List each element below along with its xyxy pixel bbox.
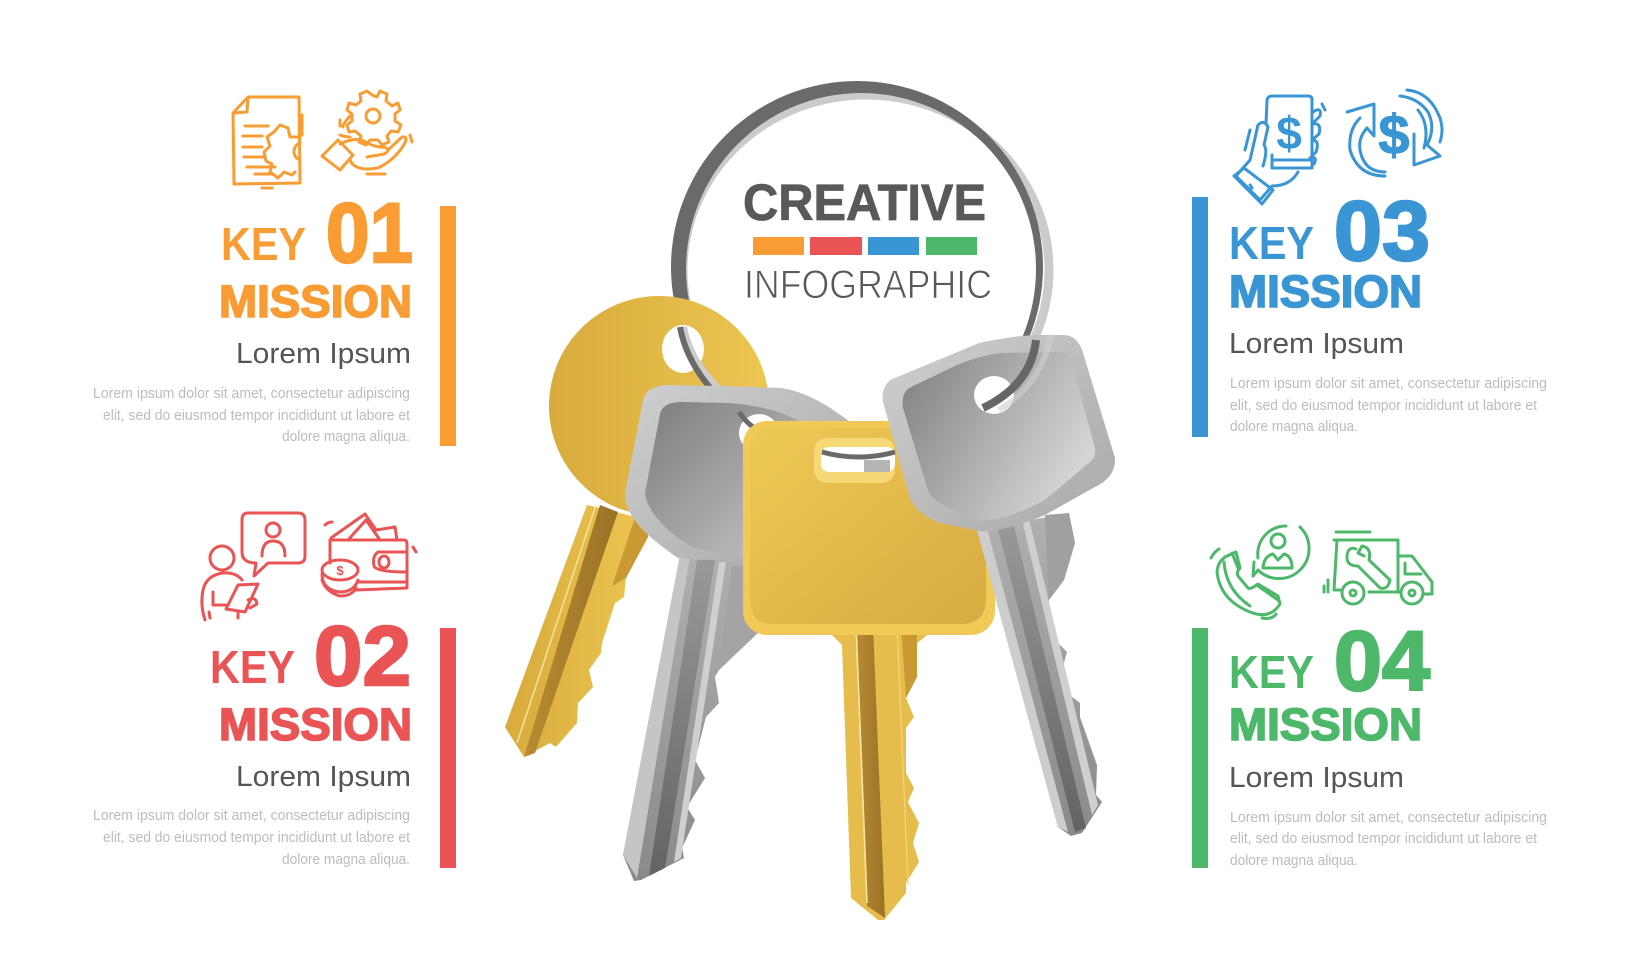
accent bar 04 [1192, 628, 1208, 868]
heading key 04 [1229, 614, 1430, 708]
title word creative: CREATIVE [743, 174, 986, 231]
heading key 01 [221, 186, 413, 280]
mission heading 03: MISSION [1229, 266, 1422, 317]
heading key 01: KEY [221, 218, 306, 270]
subheading 01: Lorem Ipsum [236, 338, 411, 370]
key ring and keys illustration [505, 81, 1115, 920]
heading key 02 [210, 609, 411, 703]
metal key ring [671, 81, 1049, 453]
mission heading 01: MISSION [219, 276, 412, 327]
title word infographic: INFOGRAPHIC [744, 263, 992, 307]
icons 02: consultant and wallet: $ [336, 563, 344, 578]
gold round key [505, 296, 769, 757]
accent bar 01 [440, 206, 456, 446]
heading key 02: 02 [314, 609, 411, 703]
body text 01: elit, sed do eiusmod tempor incididunt ut labore et [103, 408, 410, 424]
body text 02 [93, 808, 410, 868]
subheading 03: Lorem Ipsum [1229, 328, 1404, 360]
heading key 02: KEY [210, 641, 295, 693]
panel: key 03 mission [1192, 90, 1547, 437]
body text 04 [1230, 810, 1547, 869]
subheading 04: Lorem Ipsum [1229, 762, 1404, 794]
heading key 03: KEY [1229, 217, 1314, 269]
icons 03: phone payment and money cycle: $ [1378, 103, 1410, 166]
silver left key [623, 385, 849, 881]
icons 02: consultant and wallet [202, 513, 416, 620]
mission heading 02: MISSION [219, 699, 412, 750]
title: creative infographic [743, 174, 992, 307]
mission heading 04: MISSION [1229, 699, 1422, 750]
body text 04: dolore magna aliqua. [1230, 853, 1358, 869]
body text 03: elit, sed do eiusmod tempor incididunt ut labore et [1230, 398, 1537, 414]
body text 04: Lorem ipsum dolor sit amet, consectetur adipiscing [1230, 810, 1547, 826]
heading key 03 [1229, 184, 1430, 278]
icons 03: phone payment and money cycle [1234, 90, 1442, 204]
heading key 04: KEY [1229, 646, 1314, 698]
heading key 03: 03 [1334, 184, 1430, 278]
heading key 04: 04 [1334, 614, 1430, 708]
body text 02: Lorem ipsum dolor sit amet, consectetur adipiscing [93, 808, 410, 824]
icons 04: support call and service truck [1211, 526, 1432, 618]
body text 02: elit, sed do eiusmod tempor incididunt ut labore et [103, 830, 410, 846]
body text 01: dolore magna aliqua. [282, 429, 410, 445]
heading key 01: 01 [326, 186, 413, 280]
body text 03: dolore magna aliqua. [1230, 419, 1358, 435]
body text 02: dolore magna aliqua. [282, 852, 410, 868]
silver right key [883, 335, 1115, 836]
body text 01: Lorem ipsum dolor sit amet, consectetur adipiscing [93, 386, 410, 402]
panel: key 01 mission [93, 91, 456, 446]
icons 01: document gear and hand gear [233, 91, 412, 188]
accent bar 03 [1192, 197, 1208, 437]
panel: key 02 mission [93, 513, 456, 868]
subheading 02: Lorem Ipsum [236, 761, 411, 793]
body text 03 [1230, 376, 1547, 435]
body text 03: Lorem ipsum dolor sit amet, consectetur adipiscing [1230, 376, 1547, 392]
body text 01 [93, 386, 410, 445]
body text 04: elit, sed do eiusmod tempor incididunt ut labore et [1230, 831, 1537, 847]
colour legend bars [753, 237, 977, 255]
gold square key [743, 421, 995, 920]
icons 03: phone payment and money cycle: $ [1276, 107, 1302, 159]
accent bar 02 [440, 628, 456, 868]
panel: key 04 mission [1192, 526, 1547, 869]
